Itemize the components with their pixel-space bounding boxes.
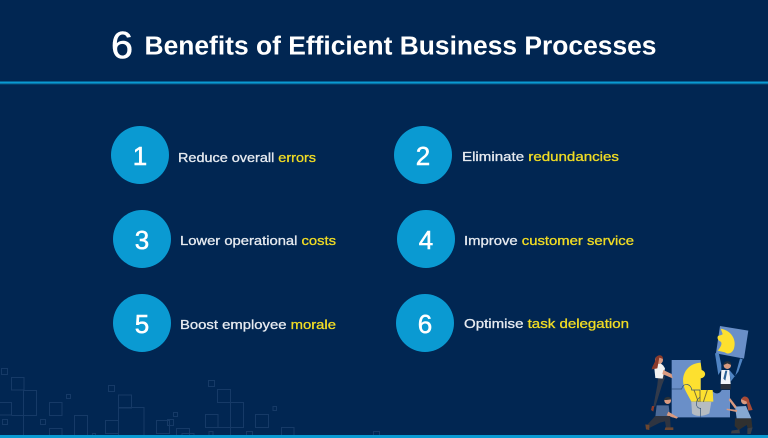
benefit 2: Eliminate redundancies [462, 149, 620, 164]
title [111, 25, 656, 67]
illustration: team assembling puzzle lightbulb [645, 326, 753, 434]
benefit 5: 5 [135, 309, 149, 339]
benefit 2: 2 [416, 141, 430, 171]
benefit 2 [394, 126, 620, 184]
benefit 4: 4 [419, 225, 433, 255]
benefit 1: Reduce overall errors [178, 150, 317, 165]
benefit 5 [113, 294, 336, 352]
bottom bar [0, 435, 768, 438]
benefit 1 [111, 126, 317, 184]
benefit 3: Lower operational costs [180, 233, 337, 248]
benefit 3: 3 [135, 225, 149, 255]
title: 6 [111, 25, 133, 67]
benefit 6: Optimise task delegation [464, 316, 629, 331]
header divider [0, 82, 768, 84]
benefit 1: 1 [133, 141, 147, 171]
title: Benefits of Efficient Business Processes [144, 32, 656, 60]
benefit 4 [397, 210, 634, 268]
benefit 3 [113, 210, 337, 268]
benefit 4: Improve customer service [464, 233, 634, 248]
benefit 6: 6 [418, 309, 432, 339]
benefit 6 [396, 294, 629, 352]
benefit 5: Boost employee morale [180, 317, 336, 332]
